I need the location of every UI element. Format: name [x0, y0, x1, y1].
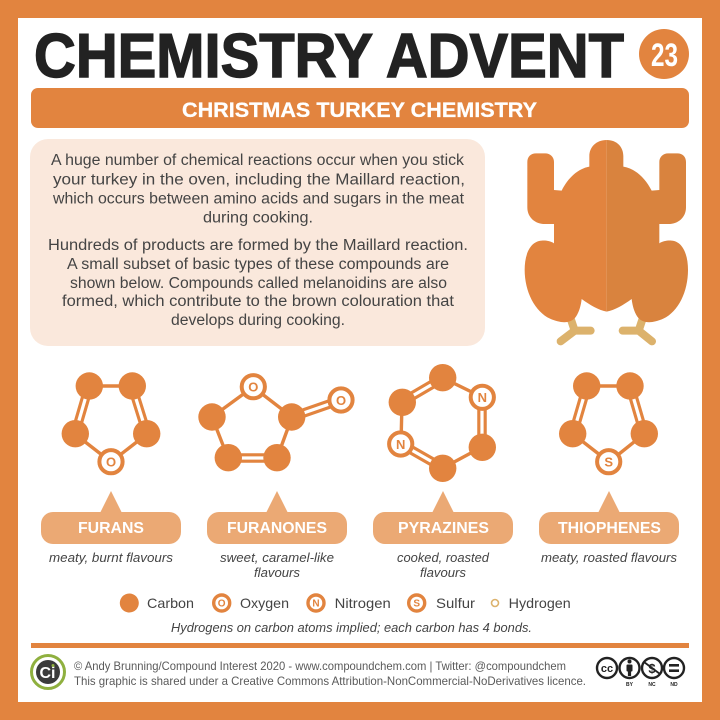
logo: compound interest: [32, 656, 64, 688]
label: pyrazines: [373, 491, 513, 544]
footer credit: [74, 659, 586, 688]
number badge: 23: [651, 37, 678, 73]
label: furanones: [207, 491, 347, 544]
text: pyrazines flavours: flavours: [420, 565, 466, 580]
legend: N: [312, 599, 320, 610]
molecule: thiophene: [559, 372, 658, 473]
icons: creative commons licence: NC: [648, 682, 656, 688]
molecule: thiophene: S: [604, 454, 613, 470]
molecule: pyrazine: [389, 364, 496, 482]
label: thiophenes: THIOPHENES: [558, 520, 661, 537]
label: furans: FURANS: [78, 520, 144, 537]
legend: O: [218, 599, 226, 610]
panel: introduction text: during cooking.: [203, 210, 313, 226]
legend note: Hydrogens on carbon atoms implied; each carbon has 4 bonds.: [171, 620, 532, 635]
molecule: furanone: O: [336, 393, 346, 408]
legend: Hydrogen: [509, 595, 571, 611]
label: furans: [41, 491, 181, 544]
text: thiophenes flavours: meaty, roasted flavours: [541, 550, 678, 565]
icons: creative commons licence: [597, 658, 684, 688]
molecule: furan: [62, 372, 160, 473]
label: pyrazines: PYRAZINES: [398, 520, 489, 537]
text: furanones flavours: sweet, caramel-like: [220, 550, 334, 565]
text: pyrazines flavours: [397, 550, 490, 580]
panel: introduction text: Hundreds of products are formed by the Maillard reaction.: [48, 237, 468, 254]
panel: introduction text: A huge number of chemical reactions occur when you stick: [51, 152, 464, 169]
panel: introduction text: your turkey in the oven, including the Maillard reaction,: [53, 172, 465, 188]
legend: Oxygen: [240, 595, 289, 611]
legend: S: [413, 599, 420, 610]
label: thiophenes: [539, 491, 679, 544]
text: furanones flavours: flavours: [254, 565, 300, 580]
legend: Carbon: [147, 595, 194, 611]
subtitle bar: CHRISTMAS TURKEY CHEMISTRY: [182, 99, 537, 122]
molecule: furanone: O: [248, 380, 258, 394]
icons: creative commons licence: $: [648, 661, 656, 676]
molecule: pyrazine: N: [396, 437, 405, 452]
text: furans flavours: meaty, burnt flavours: [49, 550, 174, 565]
panel: introduction text: A small subset of basic types of these compounds are: [67, 256, 449, 273]
icons: creative commons licence: BY: [626, 682, 634, 688]
icons: creative commons licence: cc: [601, 663, 613, 675]
panel: introduction text: which occurs between amino acids and sugars in the meat: [52, 190, 465, 208]
footer credit: © Andy Brunning/Compound Interest 2020 - www.compoundchem.com | Twitter: @compoundchem: [74, 659, 566, 673]
text: pyrazines flavours: cooked, roasted: [397, 550, 490, 565]
icon: turkey: [525, 140, 688, 341]
footer credit: This graphic is shared under a Creative Commons Attribution-NonCommercial-NoDerivatives licence.: [74, 674, 586, 688]
molecule: pyrazine: N: [478, 390, 487, 405]
panel: introduction text: formed, which contribute to the brown colouration that: [62, 293, 455, 310]
subtitle bar: [31, 88, 689, 128]
legend: Sulfur: [436, 595, 475, 611]
panel: introduction text: shown below. Compounds called melanoidins are also: [70, 275, 447, 292]
panel: introduction text: [30, 139, 485, 346]
panel: introduction text: develops during cooking.: [171, 312, 345, 329]
logo: compound interest: Ci: [40, 665, 56, 682]
label: furanones: FURANONES: [227, 520, 327, 537]
molecule: furanone: [198, 375, 353, 471]
text: furanones flavours: [220, 550, 334, 580]
title: CHEMISTRY ADVENT: [34, 22, 624, 91]
icons: creative commons licence: ND: [670, 682, 678, 688]
number badge: [639, 29, 689, 79]
legend: Nitrogen: [335, 595, 391, 611]
molecule: furan: O: [106, 454, 116, 470]
legend: [120, 594, 571, 612]
